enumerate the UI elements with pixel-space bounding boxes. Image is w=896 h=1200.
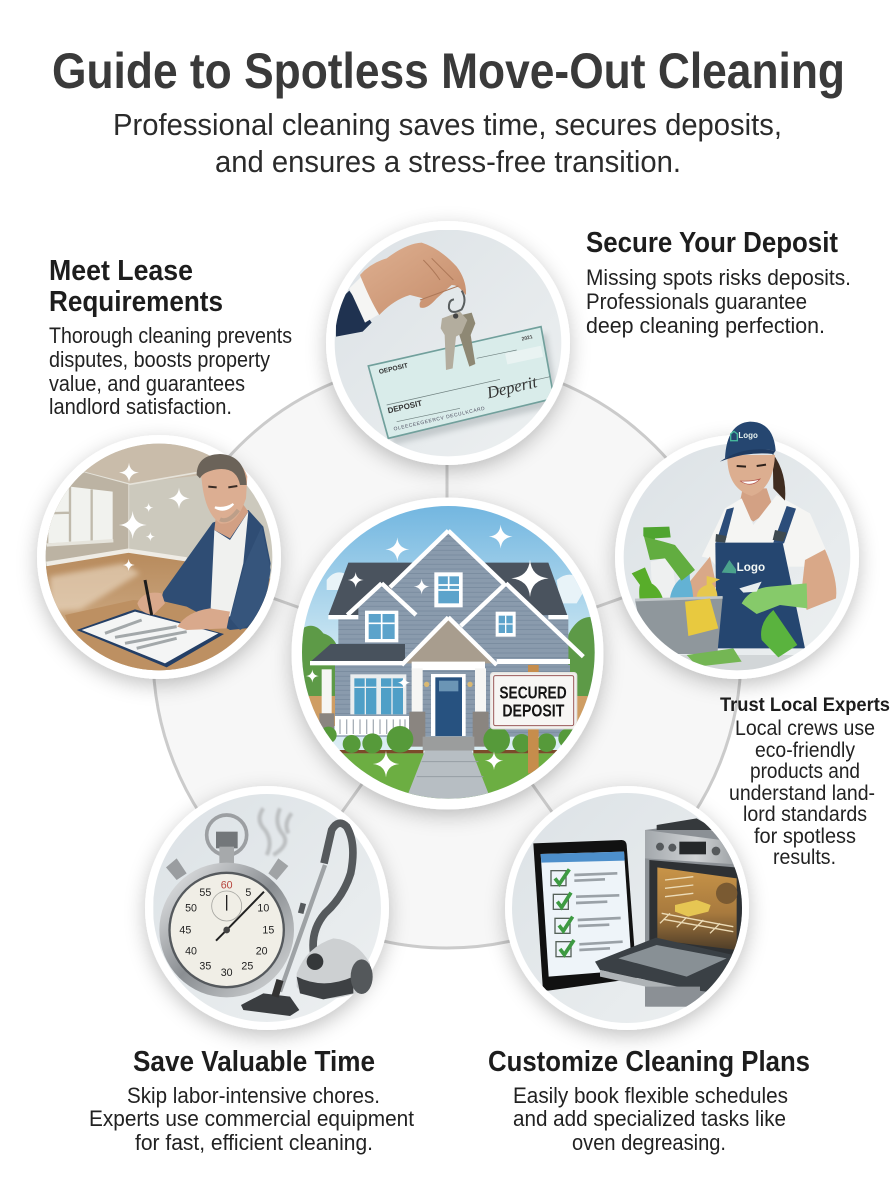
text block: Meet Lease Requirements: Requirements — [49, 286, 223, 318]
head above circle edge — [720, 422, 785, 501]
ring and spokes connecting the circles — [153, 360, 741, 948]
left gable — [358, 586, 392, 615]
centre gable — [405, 618, 493, 663]
text block: Trust Local Experts: Trust Local Experts — [720, 694, 890, 716]
text block: Save Valuable Time: Save Valuable Time — [133, 1046, 375, 1078]
circle: secured house: SECURED — [499, 682, 567, 702]
subtitle: and ensures a stress-free transition. — [215, 144, 681, 179]
circle: secured house: DEPOSIT — [502, 701, 565, 721]
open door — [595, 938, 747, 997]
left glove and spray head — [643, 527, 671, 547]
text block: Customize Cleaning Plans: oven degreasing. — [572, 1130, 726, 1155]
walls — [338, 615, 568, 665]
text block: Meet Lease Requirements: Thorough cleaning prevents — [49, 323, 292, 348]
porch roof — [311, 644, 405, 662]
watch — [159, 863, 294, 997]
text block: Trust Local Experts: Local crews use — [735, 717, 875, 740]
circle: stopwatch and vacuum: 40 — [185, 946, 197, 958]
text block: Customize Cleaning Plans: and add specialized tasks like — [513, 1106, 786, 1131]
text block: Customize Cleaning Plans: Customize Cleaning Plans — [488, 1046, 810, 1078]
text block: Meet Lease Requirements: disputes, boosts property — [49, 347, 270, 372]
desk — [65, 600, 249, 670]
tablet — [533, 840, 637, 991]
circle: keys and deposit cheque: 2021 — [521, 334, 533, 343]
ceiling — [84, 444, 210, 484]
yellow cloth — [685, 598, 718, 636]
text block: Trust Local Experts: eco-friendly — [755, 739, 855, 762]
bare arms — [802, 549, 836, 610]
circle: cleaner with supplies — [615, 422, 859, 679]
text block: Save Valuable Time: for fast, efficient cleaning. — [135, 1130, 373, 1155]
keys — [449, 291, 464, 312]
circle: stopwatch and vacuum — [145, 786, 389, 1030]
text block: Meet Lease Requirements: Meet Lease — [49, 255, 193, 287]
neck — [738, 488, 773, 522]
sponge — [687, 648, 742, 667]
circle: stopwatch and vacuum: 10 — [257, 903, 269, 915]
text block: Secure Your Deposit — [586, 227, 851, 338]
hands and pen — [137, 593, 165, 615]
text block: Trust Local Experts: understand land- — [729, 782, 875, 805]
crown and buttons — [207, 815, 247, 855]
text block: Secure Your Deposit: Secure Your Deposit — [586, 227, 838, 259]
text block: Save Valuable Time: Skip labor-intensive chores. — [127, 1083, 380, 1108]
circle: stopwatch and vacuum: 30 — [221, 967, 233, 979]
text block: Meet Lease Requirements: landlord satisfaction. — [49, 394, 232, 419]
columns — [322, 669, 332, 713]
clipboard — [77, 609, 224, 667]
circle: stopwatch and vacuum: 15 — [262, 924, 274, 936]
text block: Trust Local Experts: lord standards — [743, 803, 867, 826]
porch window — [350, 674, 406, 714]
circle: keys and deposit cheque: Deperit — [484, 372, 539, 402]
circle: keys and deposit cheque: OLEECEEGEERCV DECULKCARD — [393, 406, 486, 433]
circle: stopwatch and vacuum: 50 — [185, 903, 197, 915]
text block: Save Valuable Time: Experts use commercial equipment — [89, 1106, 414, 1131]
window — [48, 487, 113, 543]
railing — [335, 716, 409, 735]
text block: Secure Your Deposit: Missing spots risks deposits. — [586, 265, 851, 290]
sign — [528, 665, 539, 773]
bushes — [340, 750, 558, 754]
floor and baseboard — [43, 552, 277, 677]
oven — [645, 823, 747, 1007]
circle: keys and deposit cheque: DEPOSIT — [387, 399, 423, 415]
text block: Meet Lease Requirements: value, and guarantees — [49, 371, 245, 396]
circle: checklist tablet and oven — [505, 786, 749, 1030]
subtitle — [113, 107, 782, 179]
right glove and spray — [742, 583, 807, 614]
circle: stopwatch and vacuum: 35 — [199, 960, 211, 972]
text block: Customize Cleaning Plans: Easily book flexible schedules — [513, 1083, 788, 1108]
sparkles — [119, 463, 190, 571]
cheque shadow — [373, 333, 558, 445]
circle: stopwatch and vacuum: 45 — [179, 924, 191, 936]
upper window — [434, 572, 463, 607]
circle: stopwatch and vacuum: 5 — [245, 887, 251, 899]
circle: stopwatch and vacuum: 20 — [256, 946, 268, 958]
shirt — [702, 495, 827, 567]
circle: stopwatch and vacuum: 60 — [221, 880, 233, 892]
trees — [300, 617, 598, 697]
text block: Secure Your Deposit: deep cleaning perfection. — [586, 313, 825, 338]
subtitle: Professional cleaning saves time, secures deposits, — [113, 107, 782, 142]
circle: keys and deposit cheque: OEPOSIT — [378, 362, 409, 376]
vacuum cleaner overflowing the circle — [241, 823, 373, 1016]
main roof — [328, 563, 567, 615]
text block: Trust Local Experts: for spotless — [754, 825, 856, 848]
circle: keys and deposit cheque — [326, 221, 570, 465]
circle: man signing lease in empty room — [37, 435, 281, 679]
hand — [360, 243, 466, 315]
circle: secured house — [292, 498, 604, 810]
text block: Trust Local Experts — [720, 694, 890, 869]
sparkles — [306, 525, 549, 777]
cheque — [368, 327, 554, 438]
head above circle edge: Logo — [738, 431, 758, 440]
clouds — [327, 572, 587, 603]
bottles — [632, 567, 663, 598]
text block: Meet Lease Requirements — [49, 255, 292, 419]
right gable — [502, 586, 568, 659]
text block: Trust Local Experts: results. — [773, 846, 836, 869]
text block: Trust Local Experts: products and — [750, 760, 860, 783]
smoke — [260, 808, 292, 855]
bucket — [635, 597, 723, 654]
circle: stopwatch and vacuum: 25 — [241, 960, 253, 972]
table — [680, 655, 794, 670]
text block: Save Valuable Time — [89, 1046, 414, 1155]
text block: Customize Cleaning Plans — [488, 1046, 810, 1155]
jacket and cuff — [336, 291, 372, 337]
body — [161, 510, 271, 630]
door — [431, 674, 466, 736]
text block: Secure Your Deposit: Professionals guarantee — [586, 289, 807, 314]
apron — [715, 543, 805, 648]
head overflowing the circle — [197, 454, 248, 538]
circle: stopwatch and vacuum: 55 — [199, 887, 211, 899]
circle: cleaner with supplies: Logo — [737, 561, 765, 574]
